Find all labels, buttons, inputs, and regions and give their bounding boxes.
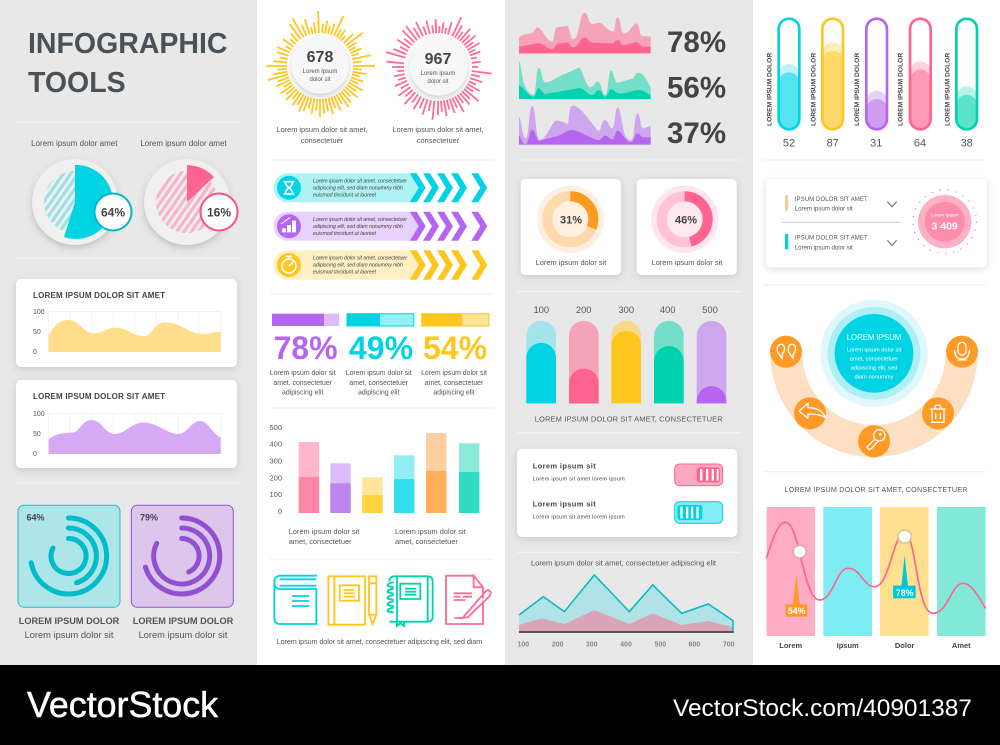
card: yellow area chart: 0	[33, 349, 37, 356]
area line chart: Lorem ipsum dolor sit amet, consectetuer adipiscing elit	[531, 558, 717, 567]
column chart with curve: Dolor	[895, 641, 915, 650]
list item 2: IPSUM DOLOR SIT AMET	[795, 236, 868, 242]
icon: document and pen	[446, 576, 491, 624]
arrow banner cyan: euismod tincidunt ut laoreet	[313, 192, 377, 198]
semicircle icon arc: adipiscing elit, sed	[851, 366, 897, 372]
card: donut 46%: 46%	[675, 214, 697, 226]
progress stat 54%: 54%	[423, 330, 487, 366]
marker 78%	[893, 529, 916, 598]
stacked bar chart: 500	[269, 423, 282, 432]
stacked bar chart	[269, 423, 479, 546]
icon: quotes	[770, 336, 802, 368]
arrow banner yellow: euismod tincidunt ut laoreet	[313, 269, 377, 275]
column chart with curve: 78%	[896, 588, 914, 598]
vertical tube gauges: 31	[870, 138, 882, 150]
radial burst 678: dolor sit	[309, 77, 331, 83]
radial burst 678	[266, 11, 375, 145]
card: toggles: Lorem ipsum sit amet lorem ipsum	[533, 477, 625, 483]
card: toggles	[517, 449, 737, 537]
title: INFOGRAPHIC	[28, 28, 228, 60]
progress stat 54%: Lorem ipsum dolor sit	[421, 370, 487, 377]
semicircle icon arc: LOREM IPSUM	[847, 333, 901, 342]
card: purple area chart: 0	[33, 451, 37, 458]
card: purple area chart: 100	[33, 411, 45, 418]
card: donut 46%: Lorem ipsum dolor sit	[652, 258, 722, 267]
progress stat 78%: adipiscing elit	[282, 390, 323, 396]
tube 38	[956, 19, 977, 138]
capsule bar chart: 200	[576, 304, 592, 315]
icon: hourglass	[284, 182, 294, 194]
progress stat 54%: adipiscing elit	[433, 390, 475, 396]
area line chart: 300	[586, 642, 598, 649]
footer watermark: VectorStock	[27, 685, 218, 725]
stacked bar chart: amet, consectetuer	[395, 537, 458, 546]
semicircle icon arc	[770, 300, 978, 457]
area chart 78%	[519, 13, 726, 59]
list item 1: IPSUM DOLOR SIT AMET	[795, 197, 868, 203]
list item 2	[785, 234, 897, 251]
progress stat 54%	[421, 314, 489, 396]
area line chart: 600	[688, 642, 700, 649]
stacked bar chart: Lorem ipsum dolor sit	[395, 527, 466, 536]
capsule bar chart: 500	[702, 304, 718, 315]
icon: trash	[922, 397, 954, 429]
icon: book	[274, 576, 317, 624]
area chart 37%: 37%	[667, 117, 726, 150]
counter 3 409: Lorem ipsum	[931, 212, 959, 218]
vertical tube gauges	[766, 19, 977, 150]
capsule bar chart: LOREM IPSUM DOLOR SIT AMET, CONSECTETUER	[535, 415, 723, 424]
radial burst 967	[386, 17, 492, 145]
radial progress purple: LOREM IPSUM DOLOR	[133, 616, 234, 626]
radial burst 678: 678	[307, 49, 333, 66]
icon: stopwatch	[282, 256, 296, 273]
panel: column 1	[16, 28, 238, 640]
progress stat 49%: amet, consectetuer	[349, 380, 409, 387]
panel: column 2	[266, 11, 492, 646]
tube 64	[910, 19, 931, 136]
tube 31	[866, 19, 887, 139]
counter 3 409	[913, 190, 976, 253]
arrow banner purple: adipiscing elit, sed diam nonummy nibh	[313, 224, 403, 230]
radial burst 678: Lorem ipsum dolor sit amet,	[276, 125, 368, 134]
stacked bar chart: Lorem ipsum dolor sit	[289, 527, 359, 536]
stacked bar chart: 400	[269, 440, 282, 448]
vertical tube gauges: LOREM IPSUM DOLOR	[766, 53, 774, 126]
toggle cyan	[675, 502, 723, 523]
vertical tube gauges: 38	[961, 138, 973, 150]
card: toggles: Lorem ipsum sit	[533, 462, 596, 471]
progress stat 49%: 49%	[349, 330, 413, 366]
card: list with counter	[766, 179, 987, 267]
footer watermark: VectorStock.com/40901387	[673, 695, 972, 722]
vertical tube gauges: LOREM IPSUM DOLOR	[898, 53, 905, 126]
area chart 56%	[519, 62, 726, 105]
arrow banner purple: Lorem ipsum dolor sit amet, consectetuer	[313, 217, 407, 223]
icon: bar chart	[281, 217, 296, 232]
card: donut 46%	[637, 179, 737, 275]
pie chart 16%: Lorem ipsum dolor amet	[140, 139, 227, 148]
progress stat 78%: amet, consectetuer	[273, 380, 333, 387]
card: donut 31%: Lorem ipsum dolor sit	[536, 258, 606, 267]
radial progress teal: LOREM IPSUM DOLOR	[19, 616, 120, 626]
arrow banner cyan	[274, 173, 487, 202]
arrow banner yellow: Lorem ipsum dolor sit amet, consectetuer	[313, 256, 407, 262]
panel: column 4	[766, 19, 987, 650]
progress stat 49%: Lorem ipsum dolor sit	[346, 370, 412, 377]
card: toggles: Lorem ipsum sit	[533, 500, 596, 509]
list item 1: Lorem ipsum dolor sit	[795, 206, 853, 213]
radial burst 678: consectetuer	[301, 136, 344, 145]
counter 3 409: 3 409	[932, 220, 958, 232]
line icons: books and notes	[274, 576, 491, 646]
semicircle icon arc: amet, consectetuer	[850, 356, 898, 362]
card: yellow area chart: LOREM IPSUM DOLOR SIT AMET	[33, 291, 165, 300]
capsule bar chart: 100	[533, 304, 549, 315]
column chart with curve: Lorem	[779, 641, 802, 650]
pie chart 16%: 16%	[207, 206, 231, 220]
title: TOOLS	[28, 67, 126, 99]
arrow banner purple	[274, 212, 487, 241]
capsule bar chart	[526, 304, 726, 424]
toggle pink	[675, 464, 723, 486]
radial burst 678: Lorem ipsum	[303, 69, 337, 75]
list item 2: Lorem ipsum dolor sit	[795, 244, 853, 251]
vertical tube gauges: LOREM IPSUM DOLOR	[854, 53, 861, 126]
progress stat 78%	[270, 314, 339, 396]
arrow banner yellow	[273, 250, 487, 280]
radial progress teal	[18, 505, 120, 640]
tube 87	[822, 19, 843, 137]
vertical tube gauges: 87	[827, 138, 839, 150]
radial progress purple: Lorem ipsum dolor sit	[139, 630, 228, 640]
area line chart: 400	[620, 642, 632, 649]
radial burst 967: 967	[425, 51, 451, 68]
column chart with curve: Ipsum	[837, 641, 859, 650]
area line chart: 500	[654, 642, 666, 649]
progress stat 49%	[346, 314, 414, 396]
pie chart 64%	[31, 139, 132, 245]
progress stat 49%: adipiscing elit	[358, 390, 399, 396]
vertical tube gauges: 52	[783, 138, 795, 150]
stacked bar chart: 100	[269, 490, 282, 499]
area chart 56%: 56%	[667, 72, 726, 105]
area line chart: 100	[517, 642, 529, 649]
stacked bar chart: 300	[269, 456, 282, 466]
column chart with curve: 54%	[788, 606, 806, 616]
tube 52	[779, 19, 799, 139]
panel: column 3	[517, 13, 737, 649]
vertical tube gauges: LOREM IPSUM DOLOR	[810, 53, 818, 126]
card: yellow area chart	[16, 279, 237, 367]
radial burst 967: dolor sit	[427, 79, 449, 85]
capsule bar chart: 400	[660, 304, 676, 315]
stacked bar chart: amet, consectetuer	[289, 537, 352, 546]
icon: notebook and pencil	[328, 576, 376, 625]
pie chart 64%: 64%	[101, 206, 125, 220]
vertical tube gauges: LOREM IPSUM DOLOR	[944, 53, 951, 126]
marker 54%	[786, 544, 807, 617]
list item 1	[785, 195, 897, 213]
area line chart	[517, 558, 735, 649]
progress stat 78%: Lorem ipsum dolor sit	[270, 370, 336, 377]
arrow banner cyan: Lorem ipsum dolor sit amet, consectetuer	[313, 178, 407, 184]
pie chart 64%: Lorem ipsum dolor amet	[31, 139, 118, 148]
stacked bar chart: 200	[269, 474, 282, 482]
icon: reply arrow	[794, 397, 826, 429]
pie chart 16%	[140, 139, 238, 245]
capsule bar chart: 300	[618, 304, 634, 315]
vertical tube gauges: 64	[914, 138, 926, 150]
title	[28, 28, 228, 99]
icon: key	[858, 425, 890, 457]
line icons: books and notes: Lorem ipsum dolor sit amet, consectetuer adipiscing elit, sed diam	[277, 637, 482, 646]
column chart with curve	[766, 485, 986, 650]
card: donut 31%	[521, 179, 621, 275]
column chart with curve: LOREM IPSUM DOLOR SIT AMET, CONSECTETUER	[784, 485, 968, 494]
radial progress purple	[131, 505, 234, 640]
area chart 78%: 78%	[667, 26, 726, 59]
area line chart: 200	[552, 642, 564, 649]
card: purple area chart	[16, 380, 237, 468]
semicircle icon arc: Lorem ipsum dolor sit	[847, 348, 902, 354]
column chart with curve: Amet	[952, 641, 971, 650]
radial burst 967: Lorem ipsum	[421, 71, 455, 77]
stacked bar chart: 0	[278, 507, 282, 516]
radial burst 967: consectetuer	[417, 136, 460, 145]
semicircle icon arc: diam nonummy	[855, 375, 894, 381]
card: yellow area chart: 100	[33, 309, 45, 316]
arrow banner purple: euismod tincidunt ut laoreet	[313, 231, 377, 237]
arrow banner cyan: adipiscing elit, sed diam nonummy nibh	[313, 186, 403, 192]
radial burst 967: Lorem ipsum dolor sit amet,	[392, 125, 484, 134]
icon: spiral notebook	[388, 576, 433, 626]
area line chart: 700	[723, 642, 735, 649]
arrow banner yellow: adipiscing elit, sed diam nonummy nibh	[313, 262, 403, 268]
progress stat 78%: 78%	[273, 330, 338, 366]
card: yellow area chart: 50	[33, 329, 41, 336]
icon: microphone	[946, 336, 978, 368]
radial progress teal: Lorem ipsum dolor sit	[25, 630, 114, 640]
area chart 37%	[519, 106, 726, 150]
card: purple area chart: LOREM IPSUM DOLOR SIT AMET	[33, 392, 165, 401]
footer watermark	[27, 685, 972, 725]
card: toggles: Lorem ipsum sit amet lorem ipsum	[533, 514, 625, 520]
card: purple area chart: 50	[33, 431, 41, 438]
radial progress teal: 64%	[26, 512, 45, 522]
progress stat 54%: amet, consectetuer	[425, 380, 484, 387]
card: donut 31%: 31%	[560, 214, 582, 226]
radial progress purple: 79%	[140, 512, 158, 522]
